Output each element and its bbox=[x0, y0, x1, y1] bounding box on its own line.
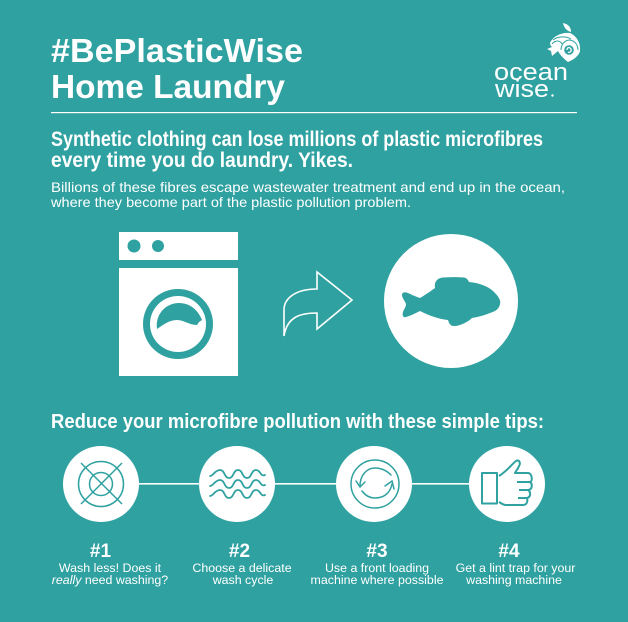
tip 3 text: Use a front loading bbox=[325, 561, 429, 575]
title: #BePlasticWise bbox=[51, 32, 303, 69]
logo: Ocean Wise bbox=[494, 23, 580, 103]
tip 1 text bbox=[52, 541, 168, 587]
tip 2 text: Choose a delicate bbox=[192, 561, 292, 575]
title bbox=[51, 32, 303, 105]
tip 3 bbox=[311, 446, 444, 587]
icon: delicate wave bbox=[199, 446, 275, 522]
tips heading: Reduce your microfibre pollution with these simple tips: bbox=[51, 410, 544, 433]
icon: do not wash bbox=[63, 446, 139, 522]
icon: washing machine bbox=[119, 232, 238, 376]
body text bbox=[50, 180, 565, 210]
logo wordmark: wise bbox=[494, 76, 549, 103]
subheading: Synthetic clothing can lose millions of plastic microfibres bbox=[51, 128, 543, 151]
icon: front loader cycle bbox=[336, 446, 412, 522]
tip 3 text: machine where possible bbox=[311, 573, 444, 587]
tip 2 text: wash cycle bbox=[212, 573, 273, 587]
logo wordmark: ocean bbox=[494, 59, 568, 86]
icon: thumbs up bbox=[469, 446, 545, 522]
tip 2 bbox=[192, 446, 292, 587]
tip 2 text: #2 bbox=[229, 541, 250, 562]
logo wordmark bbox=[494, 59, 568, 103]
icon: fish in circle bbox=[384, 234, 518, 368]
subheading bbox=[51, 128, 543, 172]
subheading: every time you do laundry. Yikes. bbox=[51, 149, 353, 172]
tip 1 text: #1 bbox=[90, 541, 111, 562]
body text: Billions of these fibres escape wastewater treatment and end up in the ocean, bbox=[51, 180, 565, 195]
tip 1 text: really need washing? bbox=[52, 573, 168, 587]
title: Home Laundry bbox=[51, 68, 286, 105]
tip 1 bbox=[52, 446, 168, 587]
tip 3 text: #3 bbox=[366, 541, 388, 562]
tip 4 text bbox=[456, 541, 575, 587]
tip 4 bbox=[456, 446, 575, 587]
tip 3 text bbox=[311, 541, 444, 587]
tip 4 text: Get a lint trap for your bbox=[456, 561, 575, 575]
tip 1 text: Wash less! Does it bbox=[59, 561, 162, 575]
tip 4 text: #4 bbox=[498, 541, 520, 562]
icon: logo fish bbox=[547, 23, 580, 62]
body text: where they become part of the plastic pollution problem. bbox=[50, 195, 411, 210]
tip 4 text: washing machine bbox=[465, 573, 562, 587]
arrow bbox=[284, 272, 352, 336]
tip 2 text bbox=[192, 541, 292, 587]
